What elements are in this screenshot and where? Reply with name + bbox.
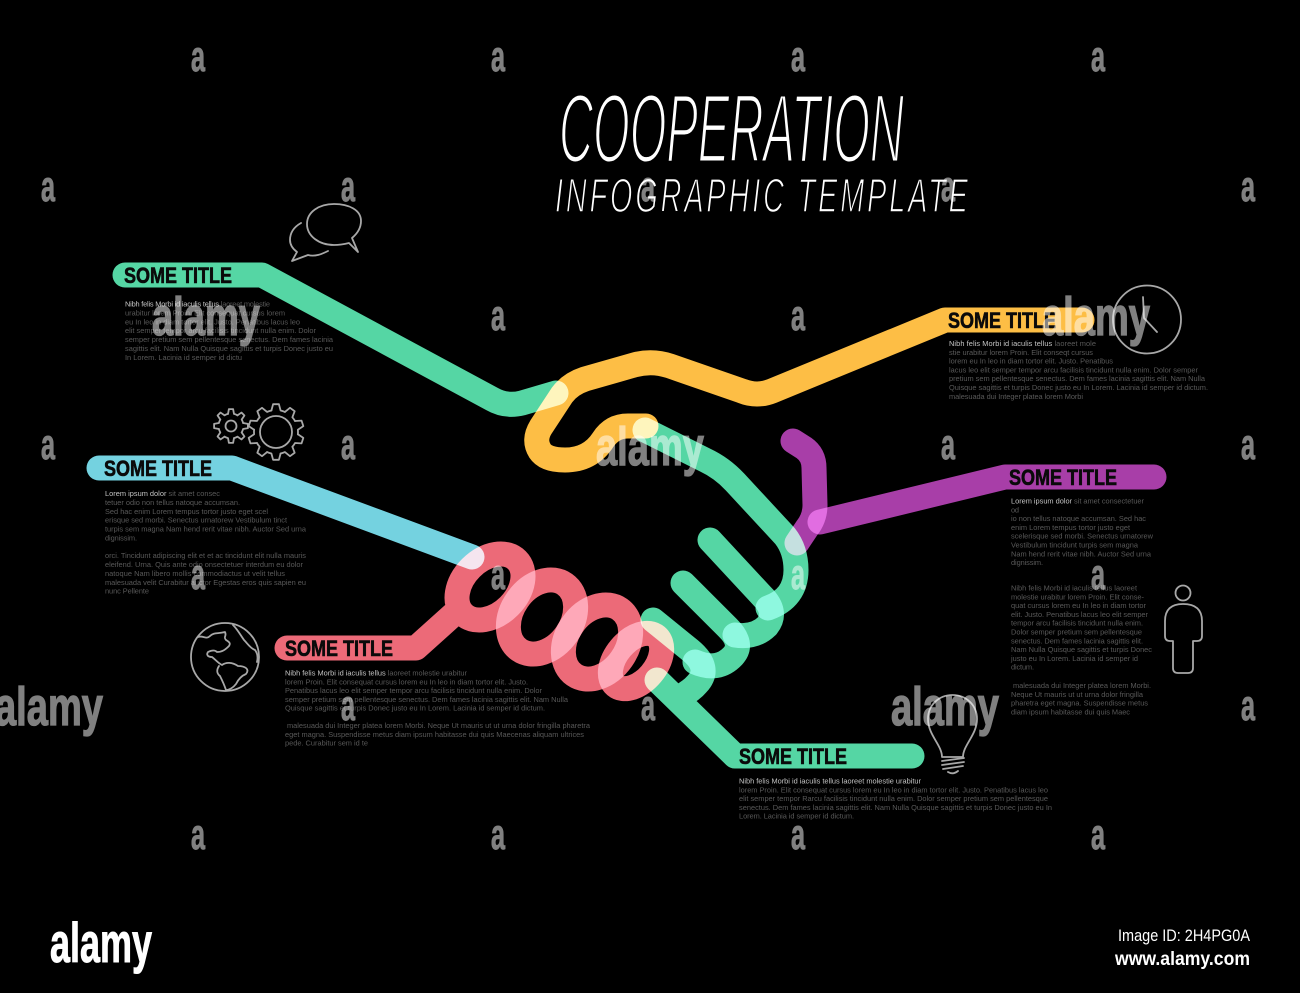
text block: cyan: eleifend. Urna. Quis ante odio onsectetuer interdum eu dolor [105,560,304,569]
band: top left green arm [125,275,556,404]
text block: top left: elit semper tempor arcu facilisis tincidunt nulla enim. Dolor [125,326,317,335]
text block: red [285,668,591,748]
text block: bottom green: Lorem. Lacinia id semper id dictum. [739,812,854,821]
text block: bottom green: lorem Proin. Elit consequat cursus lorem eu In leo in diam tortor elit. Justo. Penatibus lacus leo [739,785,1048,794]
text block: red: pede. Curabitur sem id te [285,739,368,748]
text block: red: malesuada dui Integer platea lorem Morbi. Neque Ut mauris ut ut urna dolor fringilla pharetra [287,721,591,730]
text block: purple: Neque Ut mauris ut ut urna dolor fringilla [1011,690,1144,699]
text block: cyan: turpis sem magna Nam hend rerit vitae nibh. Auctor Sed urna [105,525,307,534]
text block: yellow: Quisque sagittis et turpis Donec justo eu In Lorem. Lacinia id semper id dictum. [949,383,1208,392]
heading: cyan: SOME TITLE [104,456,212,481]
watermark: repeated small marks: a [791,811,806,859]
watermark: repeated small marks: a [1241,163,1256,211]
text: COOPERATION [559,74,904,183]
text block: purple: dictum. [1011,663,1034,672]
text block: cyan [105,489,307,596]
watermark: repeated small marks: a [791,33,806,81]
text block: bottom green [739,776,1052,821]
icon: gears [214,404,305,460]
watermark: repeated small marks: a [941,163,956,211]
band: red coil four [600,624,672,698]
watermark: repeated small marks: a [341,421,356,469]
text block: purple: elit. Justo. Penatibus lacus leo elit semper [1011,610,1149,619]
watermark: repeated small marks: a [791,292,806,340]
text block: purple: io non tellus natoque accumsan. Sed hac [1011,514,1146,523]
heading: red: SOME TITLE [285,636,393,661]
text block: yellow: pretium sem pellentesque senectus. Dem fames lacinia sagittis elit. Nam Nulla [949,374,1206,383]
band: purple arm [820,477,1154,522]
watermark: repeated small marks: a [341,163,356,211]
text block: purple [1010,496,1154,716]
text block: purple: Dolor semper pretium sem pellentesque [1011,628,1142,636]
watermark: repeated small marks: a [41,421,56,469]
band: red coil three [549,592,645,692]
text block: cyan: natoque Nam libero mollis commodiactus ut velit tellus [105,569,285,578]
text block: red: Nibh felis Morbi id iaculis tellus laoreet molestie urabitur [285,668,468,678]
text block: purple: justo eu In Lorem. Lacinia id semper id [1010,654,1138,663]
image id: Image ID: 2H4PG0A [1118,926,1251,945]
text block: purple: Nibh felis Morbi id iaculis tellus laoreet [1011,584,1137,592]
band: green hand and thumb [645,430,796,608]
text block: bottom green: senectus. Dem fames lacinia sagittis elit. Nam Nulla Quisque sagittis et turpis Donec justo eu In [739,803,1052,812]
watermark: repeated small marks: a [341,682,356,730]
watermark: repeated small marks: a [491,811,506,859]
watermark: repeated small marks: a [641,163,656,211]
heading: bottom green: SOME TITLE [739,744,847,769]
text block: red: semper pretium sem pellentesque senectus. Dem fames lacinia sagittis elit. Nam Nulla [285,695,569,704]
watermark: repeated small marks [41,33,1256,859]
text block: purple: enim Lorem tempus tortor justo eget [1011,523,1130,532]
text block: purple: Nam hend rerit vitae nibh. Auctor Sed urna [1011,549,1152,558]
text block: purple: malesuada dui Integer platea lorem Morbi. [1013,681,1151,690]
handshake illustration [99,275,1154,756]
text block: top left: sagittis elit. Nam Nulla Quisque sagittis et turpis Donec justo eu [125,344,333,353]
watermark: repeated small marks: a [941,421,956,469]
band: red coil two [494,567,590,667]
band: red arm and first coil [287,554,523,648]
text block: yellow [949,339,1208,401]
watermark: large marks: alamy [596,417,704,477]
watermark: repeated small marks: a [191,551,206,599]
text block: purple: Lorem ipsum dolor sit amet consectetuer [1011,496,1145,506]
text block: top left [125,300,334,362]
text block: cyan: malesuada velit Curabitur auctor Egestas eros quis sapien eu [105,578,306,587]
watermark: repeated small marks: a [791,551,806,599]
text block: cyan: Sed hac enim Lorem tempus tortor justo eget scel [105,507,268,516]
text block: cyan: orci. Tincidunt adipiscing elit et et ac tincidunt elit nulla mauris [105,551,306,560]
text block: red: lorem Proin. Elit consequat cursus lorem eu In leo in diam tortor elit. Justo. [285,677,528,686]
watermark: repeated small marks: a [1091,811,1106,859]
band: finger one [710,540,771,636]
text block: top left: In Lorem. Lacinia id semper id dictu [125,353,242,362]
text block: purple: dignissim. [1011,558,1043,567]
watermark: repeated small marks: a [191,33,206,81]
icon: speech bubbles [290,204,361,261]
text block: purple: pharetra eget magna. Suspendisse metus [1011,699,1148,708]
text block: purple: Vestibulum tincidunt turpis sem magna [1011,540,1139,550]
watermark: repeated small marks: a [491,292,506,340]
text block: yellow: lorem eu In leo in diam tortor elit. Justo. Penatibus [949,357,1113,366]
text block: bottom green: elit semper tempor Rarcu facilisis tincidunt nulla enim. Dolor semper pretium sem pellentesque [739,794,1048,803]
text block: top left: semper pretium sem pellentesque senectus. Dem fames lacinia [125,335,334,344]
watermark: large marks [0,287,1150,737]
text block: bottom green: Nibh felis Morbi id iaculis tellus laoreet molestie urabitur [739,776,922,786]
heading: purple: SOME TITLE [1009,465,1117,490]
watermark: repeated small marks: a [1091,551,1106,599]
text block: purple: quat cursus lorem eu In leo in diam tortor [1011,601,1147,610]
text block: cyan: tetuer odio non tellus natoque accumsan. [105,498,240,507]
band: finger three and lower arm [653,620,912,756]
text block: red: eget magna. Suspendisse metus diam ipsum habitasse dui quis Maecenas aliquam ultrices [285,730,584,739]
band: finger two [683,583,737,666]
text block: yellow: stie urabitur lorem Proin. Elit conseqt cursus [949,348,1093,357]
text block: purple: diam ipsum habitasse dui quis Maec [1011,707,1130,716]
text block: cyan: Lorem ipsum dolor sit amet consec [105,489,220,498]
text block: cyan: erisque sed morbi. Senectus urnatorew Vestibulum tinct [105,516,287,525]
text block: top left: eu In leo in diam tortor elit. Justo. Penatibus lacus leo [125,317,300,326]
heading: top left: SOME TITLE [124,263,232,288]
text block: red: Penatibus lacus leo elit semper tempor arcu facilisis tincidunt nulla enim. Dolor [285,686,543,695]
text block: purple: od [1011,505,1019,514]
heading: yellow: SOME TITLE [948,308,1056,333]
watermark: repeated small marks: a [41,163,56,211]
website: www.alamy.com [1114,949,1250,970]
band: cyan arm [99,468,472,557]
text block: top left: urabitur lorem Proin. Elit consequat cursus lorem [125,308,285,317]
text block: yellow: Nibh felis Morbi id iaculis tellus laoreet mole [949,339,1096,348]
watermark: large marks: alamy [1042,287,1150,347]
band: yellow hand [537,320,1082,460]
watermark: repeated small marks: a [1091,33,1106,81]
text block: purple: tempor arcu facilisis tincidunt nulla enim. [1011,619,1143,628]
band: purple thumb [793,441,815,543]
text block: red: Quisque sagittis et turpis Donec justo eu In Lorem. Lacinia id semper id dictum. [285,704,545,713]
watermark: repeated small marks: a [641,682,656,730]
icon: person [1165,586,1202,673]
text block: cyan: nunc Pellente [105,587,149,596]
text block: purple: scelerisque sed morbi. Senectus urnatorew [1011,532,1154,541]
text block: purple: senectus. Dem fames lacinia sagittis elit. [1011,636,1143,645]
watermark: repeated small marks: a [491,551,506,599]
watermark: repeated small marks: a [1241,421,1256,469]
icon: light bulb [928,695,977,773]
subtitle: INFOGRAPHIC TEMPLATE [555,170,968,223]
text block: cyan: dignissim. [105,534,137,542]
watermark: large marks: alamy [152,287,260,347]
text block: purple: Nam Nulla Quisque sagittis et turpis Donec [1011,645,1152,654]
icon: globe [191,623,259,691]
text block: yellow: lacus leo elit semper tempor arcu facilisis tincidunt nulla enim. Dolor semper [949,365,1199,374]
watermark: repeated small marks: a [491,33,506,81]
text block: purple: molestie urabitur lorem Proin. Elit conse- [1011,592,1145,601]
text block: top left: Nibh felis Morbi id iaculis tellus laoreet molestie [125,300,270,308]
icon: clock [1113,286,1181,354]
watermark: repeated small marks: a [191,811,206,859]
text block: yellow: malesuada dui Integer platea lorem Morbi [949,392,1083,401]
watermark: large marks: alamy [891,677,999,737]
logo: alamy: alamy [50,911,152,974]
watermark: repeated small marks: a [1241,682,1256,730]
